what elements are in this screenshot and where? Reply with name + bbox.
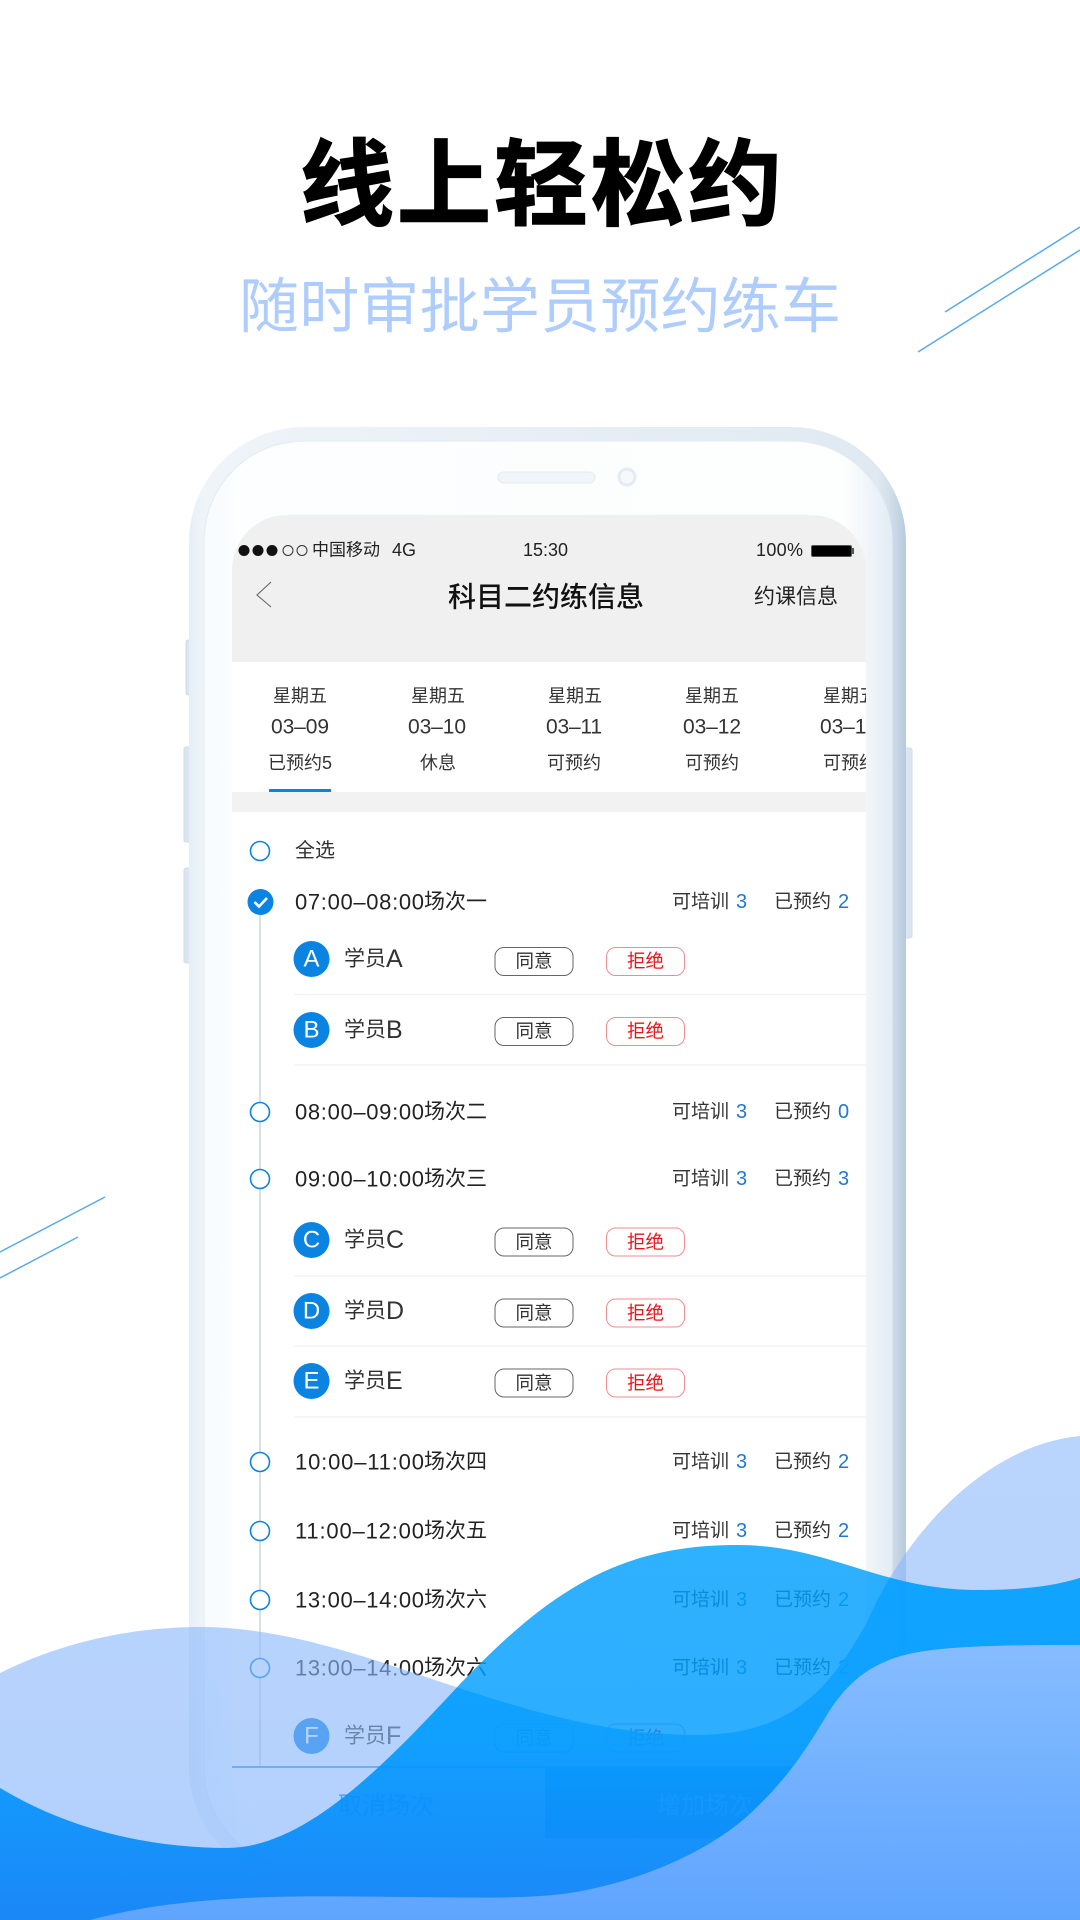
session 7: 可培训 bbox=[672, 1656, 729, 1678]
header title: 科目二约练信息 bbox=[448, 582, 644, 612]
tab 03-13: 03–13 bbox=[820, 716, 878, 738]
tab 03-10: 03–10 bbox=[408, 716, 466, 738]
session 3: 场次三 bbox=[424, 1168, 487, 1190]
session 6: 2 bbox=[838, 1589, 849, 1611]
session 7: 已预约 bbox=[774, 1656, 831, 1678]
session 3: 已预约 bbox=[774, 1168, 831, 1190]
tab 03-13 bbox=[820, 686, 866, 770]
tab 03-13: 可预约 bbox=[823, 753, 877, 773]
tab divider band bbox=[232, 792, 866, 812]
student D: 拒绝 bbox=[627, 1302, 664, 1324]
wave: light back layer bbox=[0, 1436, 1080, 1920]
session 6 bbox=[250, 1588, 848, 1610]
student A: 同意 bbox=[515, 950, 553, 972]
session 4: 场次四 bbox=[424, 1450, 487, 1474]
session 7: 场次六 bbox=[424, 1656, 487, 1680]
tab 03-11: 星期五 bbox=[548, 686, 602, 706]
student F: 拒绝 bbox=[627, 1728, 664, 1748]
phone side buttons bbox=[184, 640, 912, 963]
session 5: 可培训 bbox=[672, 1520, 729, 1542]
tab 03-10 bbox=[408, 686, 466, 773]
student F: F bbox=[304, 1722, 319, 1750]
app header bbox=[232, 515, 866, 662]
session 2: 3 bbox=[736, 1101, 747, 1123]
status bar: 100% bbox=[756, 540, 803, 560]
session 5: 3 bbox=[736, 1520, 747, 1542]
session 4: 10:00–11:00 bbox=[295, 1450, 424, 1474]
session 2: 已预约 bbox=[774, 1100, 831, 1122]
session 2: 0 bbox=[838, 1101, 849, 1123]
phone body bbox=[189, 427, 906, 1882]
camera bbox=[619, 469, 635, 485]
phone inner face bbox=[204, 441, 892, 1868]
screen bbox=[232, 515, 878, 1838]
date tabs bbox=[268, 686, 878, 792]
wave: light front layer bbox=[90, 1645, 1080, 1920]
student F: 同意 bbox=[515, 1728, 553, 1748]
student D bbox=[294, 1293, 684, 1329]
tab 03-09 bbox=[268, 686, 332, 773]
session 6: 3 bbox=[736, 1589, 747, 1611]
active tab underline bbox=[269, 789, 331, 792]
session 6: 13:00–14:00 bbox=[295, 1588, 424, 1612]
tab 03-12: 星期五 bbox=[685, 686, 739, 706]
student A: 学员A bbox=[344, 945, 403, 973]
student F: 学员F bbox=[344, 1722, 401, 1750]
session 5: 场次五 bbox=[424, 1520, 487, 1542]
session 3 bbox=[250, 1168, 848, 1190]
cancel session button: 取消场次 bbox=[338, 1792, 434, 1820]
status bar: 15:30 bbox=[523, 540, 568, 560]
session 1: 2 bbox=[838, 891, 849, 913]
student C bbox=[294, 1222, 684, 1258]
tab 03-12 bbox=[683, 686, 741, 773]
session 1: 已预约 bbox=[774, 890, 831, 912]
tab 03-11: 可预约 bbox=[547, 753, 601, 773]
session 4: 2 bbox=[838, 1451, 849, 1473]
session 6: 可培训 bbox=[672, 1588, 729, 1610]
session 4 bbox=[250, 1450, 848, 1472]
student E: 拒绝 bbox=[627, 1372, 664, 1394]
tab 03-11 bbox=[546, 686, 602, 773]
student D: 学员D bbox=[344, 1297, 404, 1325]
student F bbox=[294, 1718, 684, 1754]
session 5: 11:00–12:00 bbox=[295, 1518, 424, 1544]
session 3: 3 bbox=[736, 1168, 747, 1190]
student E bbox=[294, 1363, 684, 1399]
status bar: 4G bbox=[392, 540, 416, 560]
tab 03-11: 03–11 bbox=[546, 716, 602, 738]
tab 03-10: 休息 bbox=[420, 753, 456, 773]
back arrow bbox=[257, 582, 271, 607]
select all row: 全选 bbox=[295, 839, 335, 862]
student C: 学员C bbox=[344, 1226, 404, 1254]
session 7: 3 bbox=[736, 1657, 747, 1679]
session 7 bbox=[250, 1656, 844, 1678]
session 5 bbox=[250, 1520, 848, 1542]
session 1: 07:00–08:00 bbox=[295, 890, 424, 914]
student A bbox=[294, 941, 684, 977]
tab 03-10: 星期五 bbox=[411, 686, 465, 706]
student A: 拒绝 bbox=[627, 950, 664, 972]
student D: 同意 bbox=[515, 1302, 553, 1324]
student D: D bbox=[303, 1298, 320, 1324]
session 6: 场次六 bbox=[424, 1588, 487, 1612]
session 1 bbox=[248, 889, 849, 915]
add session button: 增加场次 bbox=[657, 1792, 753, 1820]
session 3: 可培训 bbox=[672, 1168, 729, 1190]
session 4: 3 bbox=[736, 1451, 747, 1473]
status bar: 中国移动 bbox=[312, 540, 380, 560]
decorative lines: top right bbox=[918, 227, 1080, 352]
session 3: 09:00–10:00 bbox=[295, 1166, 424, 1192]
session 4: 可培训 bbox=[672, 1450, 729, 1472]
session 5: 已预约 bbox=[774, 1520, 831, 1542]
session 5: 2 bbox=[838, 1520, 849, 1542]
session 1: 3 bbox=[736, 891, 747, 913]
header action: 约课信息 bbox=[754, 586, 838, 608]
select all row bbox=[250, 839, 335, 862]
session 7: 13:00–14:00 bbox=[295, 1656, 424, 1680]
student E: E bbox=[303, 1368, 320, 1394]
tab 03-09: 已预约5 bbox=[268, 753, 332, 773]
title: 线上轻松约 bbox=[300, 132, 782, 238]
student C: C bbox=[303, 1226, 320, 1254]
student C: 拒绝 bbox=[627, 1232, 664, 1252]
tab 03-13: 星期五 bbox=[823, 686, 877, 706]
student C: 同意 bbox=[515, 1232, 553, 1252]
session 1: 场次一 bbox=[424, 890, 487, 914]
student B: 学员B bbox=[344, 1016, 403, 1044]
tab 03-12: 可预约 bbox=[685, 753, 739, 773]
session 3: 3 bbox=[838, 1168, 849, 1190]
student A: A bbox=[303, 946, 320, 972]
timeline rail bbox=[259, 902, 261, 1767]
student B bbox=[294, 1012, 684, 1048]
session 4: 已预约 bbox=[774, 1450, 831, 1472]
phone mockup bbox=[184, 427, 912, 1882]
tab 03-09: 星期五 bbox=[273, 686, 327, 706]
session 2: 可培训 bbox=[672, 1100, 729, 1122]
wave: saturated blue middle layer bbox=[0, 1545, 1080, 1920]
tab 03-09: 03–09 bbox=[271, 716, 329, 738]
decorative lines: left bbox=[0, 1197, 105, 1278]
student E: 同意 bbox=[515, 1372, 553, 1394]
session 2: 08:00–09:00 bbox=[295, 1100, 424, 1124]
bottom action bar bbox=[232, 1766, 792, 1838]
session 1: 可培训 bbox=[672, 890, 729, 912]
session 2 bbox=[250, 1100, 848, 1122]
status bar bbox=[238, 540, 854, 558]
tab 03-12: 03–12 bbox=[683, 716, 741, 738]
student B: B bbox=[303, 1016, 320, 1044]
student B: 拒绝 bbox=[627, 1020, 664, 1042]
speaker bbox=[498, 472, 595, 483]
student E: 学员E bbox=[344, 1367, 403, 1395]
student B: 同意 bbox=[515, 1020, 553, 1042]
subtitle: 随时审批学员预约练车 bbox=[239, 274, 841, 340]
session 7: 2 bbox=[838, 1657, 849, 1679]
session 2: 场次二 bbox=[424, 1100, 487, 1124]
session 6: 已预约 bbox=[774, 1588, 831, 1610]
